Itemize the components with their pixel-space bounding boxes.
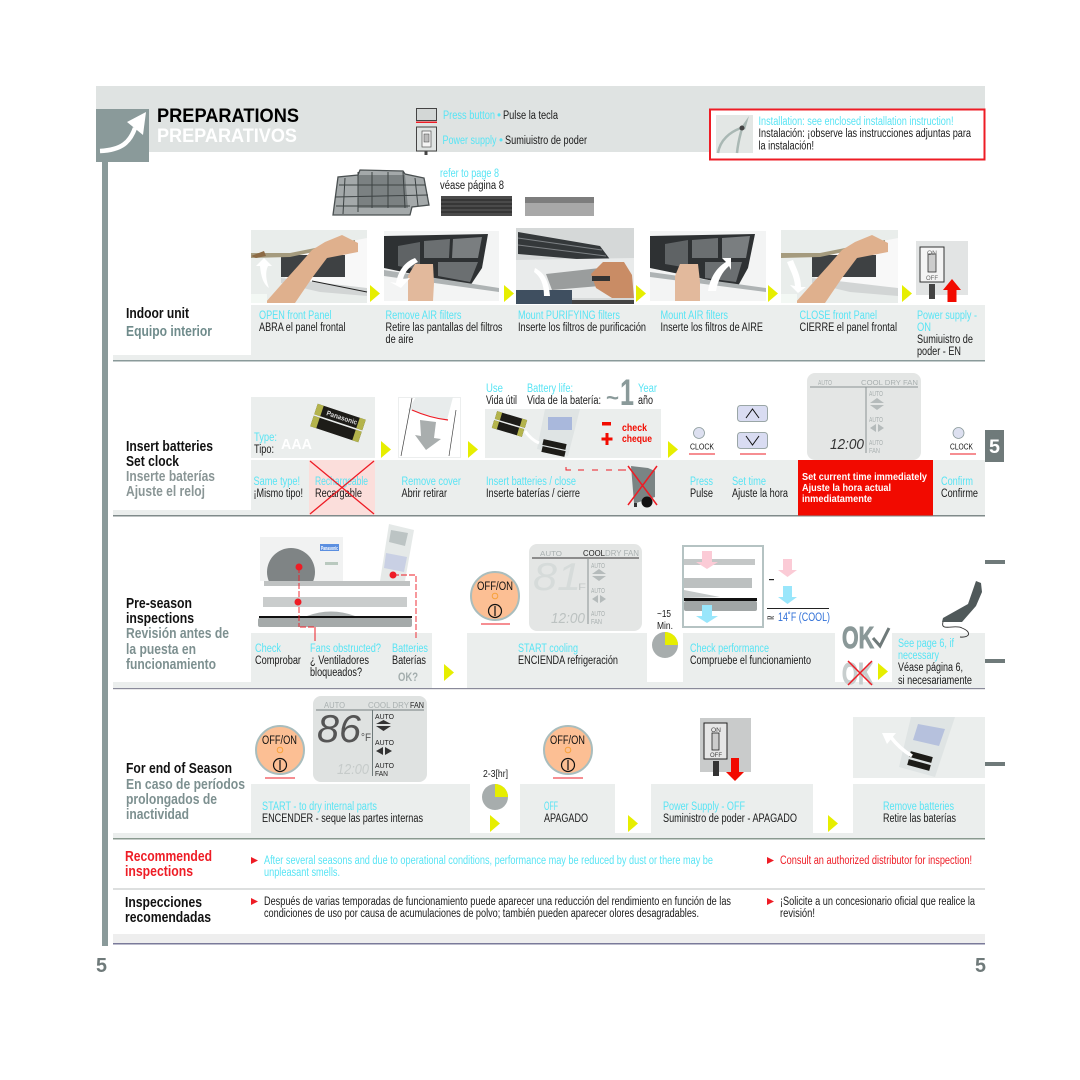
step band: pre-season: [113, 633, 985, 689]
rechargeable prohibited: Recargable: [315, 488, 362, 500]
battery life: Vida de la batería:: [527, 395, 601, 407]
display: 86F: [313, 696, 427, 782]
display: clock setting: COOL DRY FAN: [861, 378, 918, 387]
illustration: outdoor and indoor units with remote: Panasonic: [321, 546, 338, 552]
captions: pre-season check: OK?: [398, 670, 418, 684]
button: off/on off: OFF/ON: [550, 735, 585, 747]
display: 86F: AUTO: [375, 738, 394, 747]
caption: see page 6: si necesariamente: [898, 675, 972, 687]
captions: indoor unit: Sumiuistro de: [917, 334, 973, 346]
display: cool mode: AUTO: [591, 561, 605, 570]
timer: 15 minutes: Min.: [657, 620, 673, 632]
captions: batteries: Abrir retirar: [402, 488, 447, 500]
rechargeable prohibited: Rechargeable: [315, 476, 368, 488]
battery life: Year: [638, 383, 657, 395]
button: off/on dry: OFF/ON: [262, 735, 297, 747]
panel: battery type: AAA: [281, 436, 312, 453]
captions: indoor unit: poder - EN: [917, 346, 961, 358]
captions: batteries: Press: [690, 476, 713, 488]
captions: indoor unit: Inserte los filtros de AIRE: [660, 322, 763, 334]
captions: batteries: Pulse: [690, 488, 713, 500]
icon: OK check: OK: [842, 620, 874, 655]
icon: power switch off: OFF: [710, 752, 722, 759]
captions: batteries: Inserte baterías / cierre: [486, 488, 580, 500]
caption: remove batteries: [883, 801, 956, 825]
display: clock setting: AUTO: [869, 438, 883, 447]
battery life: [486, 372, 657, 413]
display: cool mode: AUTO: [540, 549, 562, 558]
display: 86F: AUTO: [375, 761, 394, 770]
captions: batteries: Insert batteries / close: [486, 476, 576, 488]
legend: press button and power supply: Sumiuistro de poder: [505, 135, 587, 147]
step band: indoor unit: [113, 305, 985, 362]
display: 86F: AUTO: [324, 701, 345, 710]
legend: press button and power supply: [416, 108, 587, 155]
captions: indoor unit: CIERRE el panel frontal: [800, 322, 897, 334]
display: clock setting: AUTO: [869, 415, 883, 424]
timer: 15 minutes: ~15: [657, 608, 671, 620]
display: clock setting: [807, 373, 921, 460]
heading: indoor unit: [126, 306, 212, 340]
polarity check: [602, 422, 652, 445]
caption: off: OFF: [544, 801, 558, 813]
page number: right: 5: [975, 955, 986, 977]
heading: end of season: En caso de períodos: [126, 777, 245, 793]
button: off/on off: [544, 726, 592, 778]
alert: set current time: [798, 460, 933, 516]
photo: performance check: [683, 546, 763, 627]
battery life: ~: [606, 385, 619, 410]
panel: battery type: Tipo:: [254, 444, 274, 456]
heading: pre-season: la puesta en: [126, 642, 196, 658]
footer band: [113, 934, 985, 944]
arrow: step 1: [370, 285, 380, 302]
panel: insert batteries: [485, 409, 661, 458]
battery life: 1: [620, 372, 634, 413]
display: cool mode: COOL: [583, 549, 606, 558]
caption: start to dry: [262, 801, 423, 825]
notice: spanish: Después de varias temporadas de funcionamiento puede aparecer una reducción del rendimiento en función de las: [264, 896, 731, 908]
captions: pre-season check: Fans obstructed?: [310, 643, 381, 655]
battery life: año: [638, 395, 653, 407]
display: 86F: COOL DRY: [368, 701, 410, 710]
heading: indoor unit: Equipo interior: [126, 324, 212, 340]
panel: battery type: Type:: [254, 432, 277, 444]
timer: 15 minutes: [652, 608, 678, 658]
caption: start to dry: START - to dry internal parts: [262, 801, 377, 813]
display: 86F: AUTO: [375, 712, 394, 721]
heading: recommended inspections: Recommended: [125, 849, 212, 865]
display: clock setting: FAN: [869, 446, 880, 455]
arrow: battery 1: [381, 441, 391, 458]
heading: inspecciones recomendadas: [125, 895, 211, 926]
button: clock: CLOCK: [690, 442, 714, 452]
captions: indoor unit: Retire las pantallas del filtros: [386, 322, 503, 334]
heading: end of season: inactividad: [126, 807, 189, 823]
arrow: end 2: [628, 815, 638, 832]
arrow: end 1: [490, 815, 500, 832]
buttons: up and down: [738, 406, 768, 454]
caption: off: [544, 801, 588, 825]
caption: power supply off: Suministro de poder - APAGADO: [663, 813, 797, 825]
captions: batteries: Confirme: [941, 488, 978, 500]
icon: power switch on: OFF: [926, 275, 938, 282]
captions: indoor unit: Mount AIR filters: [660, 310, 728, 322]
panel: battery type: [251, 397, 375, 458]
caption: check performance: Compruebe el funcionamiento: [690, 655, 811, 667]
icon: rising arrow: [96, 109, 149, 162]
heading: end of season: For end of Season: [126, 761, 232, 777]
caption: start cooling: ENCIENDA refrigeración: [518, 655, 618, 667]
captions: pre-season check: bloqueados?: [310, 667, 362, 679]
heading: end of season: [126, 761, 245, 823]
caption: remove batteries: Remove batteries: [883, 801, 954, 813]
captions: batteries: Ajuste la hora: [732, 488, 788, 500]
photo: remove air filters: [384, 231, 499, 301]
alert: set current time: Ajuste la hora actual: [802, 482, 891, 494]
heading: recommended inspections: [125, 849, 212, 880]
display: cool mode: AUTO: [591, 586, 605, 595]
captions: indoor unit: ON: [917, 322, 931, 334]
icon: power switch off: [700, 718, 751, 781]
captions: pre-season check: ¿ Ventiladores: [310, 655, 369, 667]
captions: indoor unit: CLOSE front Panel: [800, 310, 877, 322]
icon: batteries: Panasonic: [325, 410, 358, 427]
display: clock setting: AUTO: [818, 378, 832, 387]
heading: indoor unit: Indoor unit: [126, 306, 189, 322]
captions: pre-season check: Batteries: [392, 643, 428, 655]
caption: see page 6: [898, 638, 972, 687]
captions: pre-season check: Comprobar: [255, 655, 301, 667]
legend: press button and power supply: Press button: [443, 110, 495, 122]
icon: phone: [942, 581, 982, 637]
button: off/on start: OFF/ON: [477, 581, 513, 593]
heading: batteries: Insert batteries: [126, 439, 213, 455]
captions: pre-season check: Check: [255, 643, 281, 655]
notice: spanish: [251, 896, 975, 920]
legend: press button and power supply: •: [499, 135, 503, 147]
display: 86F: FAN: [410, 701, 424, 710]
polarity check: check: [622, 422, 647, 434]
callout: installation: Installation: see enclosed installation instruction!: [758, 116, 954, 128]
display: cool mode: 12:00: [551, 610, 586, 627]
caption: power supply off: [663, 801, 797, 825]
icon: power switch off: ON: [711, 727, 721, 734]
page number: left: 5: [96, 955, 107, 977]
panel: remote cover: [398, 397, 460, 458]
display: cool mode: FAN: [591, 617, 602, 626]
refer to page: [440, 168, 504, 192]
captions: pre-season check: Baterías: [392, 655, 426, 667]
captions: indoor unit: OPEN front Panel: [259, 310, 332, 322]
arrow: step 4: [768, 285, 778, 302]
rechargeable prohibited: [309, 460, 375, 515]
battery life: Vida útil: [486, 395, 517, 407]
legend: press button and power supply: •: [497, 110, 501, 122]
polarity check: cheque: [622, 433, 652, 445]
notice: english: unpleasant smells.: [264, 867, 340, 879]
heading: recommended inspections: inspections: [125, 864, 193, 880]
notice: english: [251, 855, 972, 879]
caption: remove batteries: Retire las baterías: [883, 813, 956, 825]
step band: batteries and clock: [113, 460, 985, 516]
caption: see page 6: See page 6, if: [898, 638, 955, 650]
display: 86F: FAN: [375, 769, 388, 778]
heading: pre-season: [126, 596, 229, 673]
display: clock setting: 12:00: [830, 436, 865, 453]
button: off/on start: [471, 572, 519, 624]
heading: pre-season: Revisión antes de: [126, 626, 229, 642]
display: 86F: 86: [317, 708, 361, 751]
arrow: step 5: [902, 285, 912, 302]
title: [157, 105, 299, 147]
photo: close front panel: [781, 230, 898, 303]
heading: inspecciones recomendadas: Inspecciones: [125, 895, 202, 911]
captions: indoor unit: Inserte los filtros de purificación: [518, 322, 646, 334]
caption: power supply off: Power Supply - OFF: [663, 801, 745, 813]
illustration: outdoor and indoor units with remote: [258, 524, 416, 641]
battery life: Use: [486, 383, 503, 395]
heading: inspecciones recomendadas: recomendadas: [125, 910, 211, 926]
panel: remove batteries photo: [853, 717, 985, 778]
title: PREPARATIVOS: [157, 125, 297, 147]
formula: temperature difference: ≃: [766, 613, 775, 624]
captions: indoor unit: ABRA el panel frontal: [259, 322, 346, 334]
legend: press button and power supply: Pulse la tecla: [503, 110, 558, 122]
arrow: end 3: [828, 815, 838, 832]
arrow: battery 2: [468, 441, 478, 458]
notice: spanish: revisión!: [780, 908, 815, 920]
alert: set current time: Set current time immediately: [802, 471, 927, 483]
battery life: Battery life:: [527, 383, 573, 395]
button: off/on dry: [256, 726, 304, 778]
display: 86F: 12:00: [337, 761, 370, 778]
heading: batteries: Set clock: [126, 454, 180, 470]
header band: [96, 86, 985, 946]
title: PREPARATIONS: [157, 105, 299, 127]
photo: mount air filters: [650, 231, 766, 301]
icon: not OK: [842, 656, 873, 691]
captions: indoor unit: de aire: [386, 334, 414, 346]
captions: batteries: Confirm: [941, 476, 973, 488]
button: clock confirm: CLOCK: [950, 442, 973, 452]
caption: off: APAGADO: [544, 813, 588, 825]
caption: start cooling: START cooling: [518, 643, 578, 655]
arrow: not OK: [878, 663, 888, 680]
notice: spanish: ¡Solicite a un concesionario oficial que realice la: [780, 896, 975, 908]
caption: start to dry: ENCENDER - seque las partes internas: [262, 813, 423, 825]
captions: indoor unit: Mount PURIFYING filters: [518, 310, 620, 322]
formula: temperature difference: [766, 559, 830, 624]
captions: pre-season check: [255, 643, 428, 684]
arrow: pre-season 1: [444, 664, 454, 681]
vertical spine: [102, 160, 108, 946]
display: cool mode: [529, 544, 642, 631]
heading: batteries: Inserte baterías: [126, 469, 215, 485]
heading: batteries: Ajuste el reloj: [126, 484, 205, 500]
icon: power switch on: [916, 241, 968, 302]
button: clock: [689, 428, 715, 454]
caption: check performance: [690, 643, 811, 667]
page tab: 5: [989, 437, 1000, 458]
timer: 2-3 hours: [482, 768, 508, 810]
formula: temperature difference: 14˚F (COOL): [778, 612, 830, 624]
heading: end of season: prolongados de: [126, 792, 217, 808]
photo: mount purifying filters: [516, 228, 634, 304]
refer to page: véase página 8: [440, 180, 504, 192]
captions: batteries: [254, 476, 978, 500]
button: clock confirm: [950, 428, 976, 454]
display: 86F: °F: [361, 732, 371, 744]
heading: pre-season: funcionamiento: [126, 657, 216, 673]
heading: pre-season: Pre-season: [126, 596, 192, 612]
icon: pliers: [716, 115, 753, 153]
display: cool mode: F: [578, 582, 587, 592]
notice: english: After several seasons and due to operational conditions, performance may be reduced by dust or there may be: [264, 855, 713, 867]
arrow: step 3: [636, 285, 646, 302]
icon: no trash bin: [566, 466, 657, 508]
captions: indoor unit: Remove AIR filters: [386, 310, 462, 322]
display: cool mode: DRY FAN: [605, 549, 639, 558]
timer: 2-3 hours: 2-3[hr]: [483, 768, 508, 780]
display: cool mode: 81: [533, 556, 581, 599]
captions: batteries: ¡Mismo tipo!: [254, 488, 303, 500]
callout: installation: la instalación!: [758, 140, 814, 152]
captions: indoor unit: Power supply -: [917, 310, 977, 322]
captions: batteries: Same type!: [254, 476, 300, 488]
heading: pre-season: inspections: [126, 611, 194, 627]
page tab: [985, 430, 1004, 462]
callout: installation: Instalación: ¡observe las instrucciones adjuntas para: [758, 128, 971, 140]
notice: english: Consult an authorized distributor for inspection!: [780, 855, 972, 867]
heading: batteries: [126, 439, 215, 500]
legend: press button and power supply: Power supply: [442, 135, 497, 147]
alert: set current time: inmediatamente: [802, 493, 872, 505]
caption: start cooling: [518, 643, 618, 667]
arrow: step 2: [504, 285, 514, 302]
display: clock setting: AUTO: [869, 389, 883, 398]
callout: installation: [710, 110, 984, 160]
icon: not OK: OK: [842, 656, 873, 691]
icon: power switch on: ON: [927, 250, 937, 257]
page tabs: dashes: [985, 560, 1005, 766]
captions: indoor unit: [259, 310, 977, 358]
photo: open front panel: [251, 230, 367, 303]
caption: see page 6: Véase página 6,: [898, 662, 963, 674]
air filters illustration: [333, 168, 594, 216]
caption: see page 6: necessary: [898, 650, 939, 662]
captions: batteries: Set time: [732, 476, 766, 488]
step band: end of season: [113, 784, 985, 840]
caption: check performance: Check performance: [690, 643, 769, 655]
refer to page: refer to page 8: [440, 168, 499, 180]
captions: batteries: Remove cover: [402, 476, 461, 488]
display: cool mode: AUTO: [591, 609, 605, 618]
notice: spanish: condiciones de uso por causa de acumulaciones de polvo; también pueden aparecer olores desagradables.: [264, 908, 699, 920]
arrow: battery 3: [668, 441, 678, 458]
